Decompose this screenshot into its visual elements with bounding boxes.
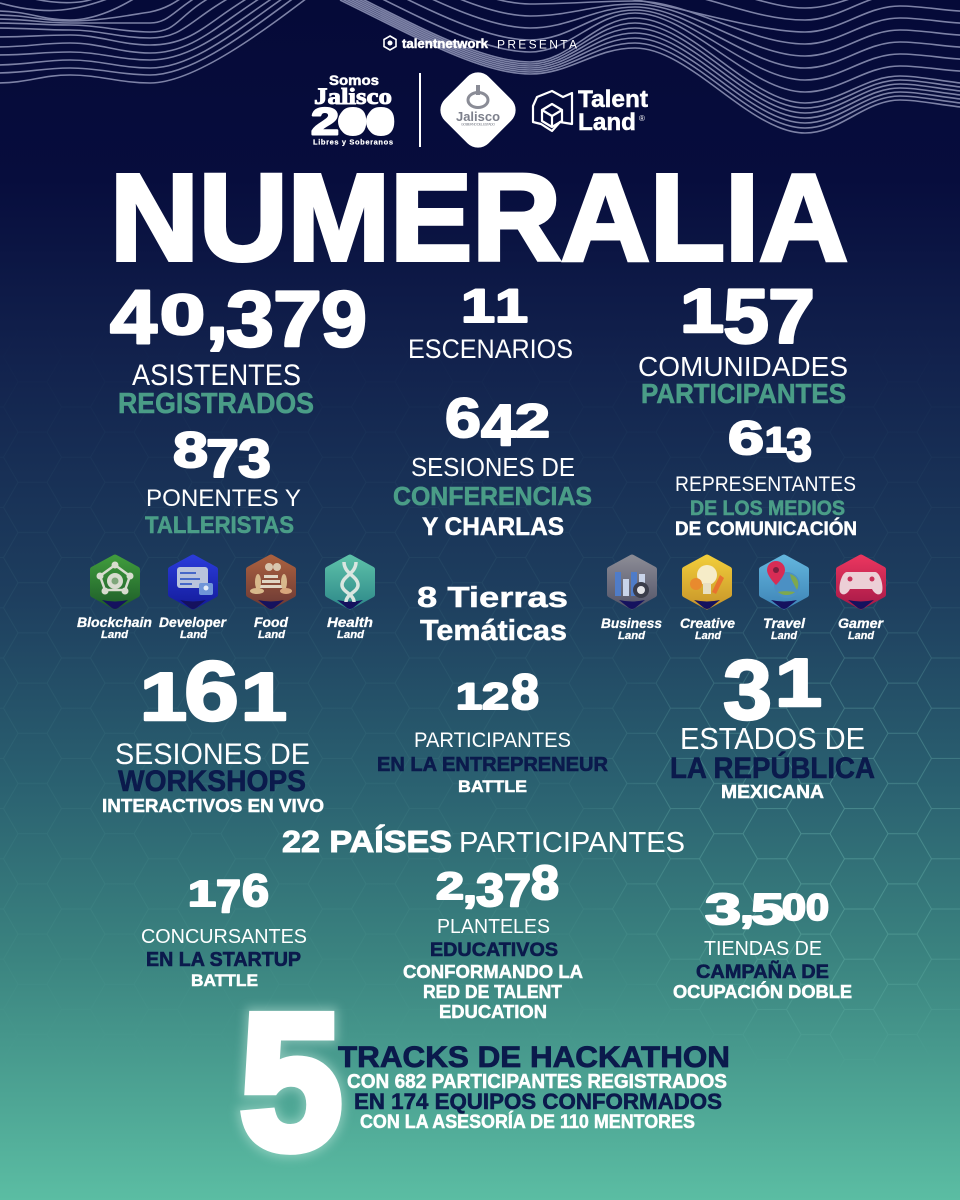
stat: 613 representantes de los medios: DE LOS MEDIOS: [690, 497, 845, 520]
stat: 613 representantes de los medios: REPRESENTANTES: [675, 473, 856, 496]
stat: 128 participantes entrepreneur battle: 2: [482, 676, 509, 717]
heading: 8 Tierras Temáticas: 8 Tierras: [417, 582, 568, 614]
big number 5 with glow: 5: [240, 974, 342, 1189]
stat: 11 escenarios: [408, 279, 573, 364]
stat: 176 concursantes startup battle: CONCURSANTES: [141, 926, 307, 948]
stat: 3,500 tiendas campaña: 5: [751, 885, 784, 934]
badge: Developer Land: [159, 558, 228, 641]
badge: Health Land: Health: [327, 614, 373, 630]
stat: 642 sesiones de conferencias y charlas: 4: [481, 393, 516, 458]
stat: 2,378 planteles educativos: PLANTELES: [437, 916, 550, 938]
heading: 22 países participantes: 22 PAÍSES: [282, 824, 452, 859]
decorative waves right: [340, 0, 960, 133]
stat: 3,500 tiendas campaña: CAMPAÑA DE: [696, 961, 829, 983]
stat: 613 representantes de los medios: [675, 411, 857, 540]
stat: 31 estados de la república: LA REPÚBLICA: [670, 751, 875, 785]
logo: Jalisco gobierno del estado: [434, 66, 522, 154]
stat: 40,379 asistentes registrados: ASISTENTES: [132, 359, 301, 392]
decorative waves left: [0, 0, 315, 83]
badge: Creative Land: Creative: [680, 615, 735, 631]
presenter line: talentnetwork presenta: [384, 36, 577, 52]
stat: 176 concursantes startup battle: BATTLE: [191, 971, 258, 990]
stat: 161 sesiones de workshops: 1: [140, 659, 187, 735]
heading: 22 países participantes: [282, 824, 685, 859]
stat: 11 escenarios: 1: [495, 279, 528, 332]
hackathon text block: EN 174 EQUIPOS CONFORMADOS: [354, 1089, 722, 1114]
badge: Creative Land: Land: [695, 630, 721, 642]
badge: Travel Land: Travel: [763, 615, 806, 631]
stat: 161 sesiones de workshops: SESIONES DE: [115, 738, 310, 771]
stat: 2,378 planteles educativos: 7: [504, 864, 531, 916]
stat: 157 comunidades participantes: COMUNIDADES: [638, 351, 848, 382]
stat: 176 concursantes startup battle: EN LA STARTUP: [146, 949, 301, 971]
heading: 22 países participantes: PARTICIPANTES: [459, 827, 685, 859]
stat: 613 representantes de los medios: DE COMUNICACIÓN: [675, 518, 857, 540]
stat: 2,378 planteles educativos: [403, 857, 583, 1022]
stat: 642 sesiones de conferencias y charlas: 6: [445, 386, 481, 449]
badge: Gamer Land: [838, 558, 885, 642]
badge: Gamer Land: Gamer: [838, 615, 885, 631]
badge: Developer Land: Land: [180, 629, 207, 641]
stat: 40,379 asistentes registrados: [110, 271, 367, 420]
stat: 128 participantes entrepreneur battle: EN LA ENTREPRENEUR: [377, 754, 609, 776]
badge: Travel Land: [762, 558, 806, 642]
hackathon text block: TRACKS DE HACKATHON: [338, 1041, 730, 1074]
logo: Somos Jalisco 200: Jalisco: [314, 84, 392, 109]
stat: 873 ponentes y talleristas: 7: [206, 429, 239, 489]
title: NUMERALIA: [110, 150, 848, 287]
stat: 157 comunidades participantes: PARTICIPANTES: [641, 378, 846, 409]
stat: 11 escenarios: 1: [461, 279, 495, 332]
background hexagon pattern: [0, 544, 960, 686]
stat: 3,500 tiendas campaña: 3: [705, 885, 741, 934]
stat: 873 ponentes y talleristas: TALLERISTAS: [145, 512, 294, 539]
badge: Travel Land: Land: [771, 630, 797, 642]
logo: Talent Land: ®: [639, 114, 645, 123]
stat: 176 concursantes startup battle: 1: [188, 873, 216, 914]
stat: 161 sesiones de workshops: [102, 644, 324, 816]
stat: 161 sesiones de workshops: INTERACTIVOS EN VIVO: [102, 796, 324, 816]
stat: 3,500 tiendas campaña: ,: [740, 887, 754, 931]
stat: 128 participantes entrepreneur battle: 8: [511, 664, 539, 720]
stat: 3,500 tiendas campaña: OCUPACIÓN DOBLE: [673, 981, 852, 1002]
hackathon text block: [338, 1041, 730, 1133]
stat: 3,500 tiendas campaña: TIENDAS DE: [704, 938, 822, 960]
stat: 873 ponentes y talleristas: 3: [238, 429, 271, 489]
presenter line: talentnetwork presenta: PRESENTA: [497, 38, 577, 52]
stat: 40,379 asistentes registrados: 0: [160, 283, 205, 347]
logo: Jalisco gobierno del estado: Jalisco: [456, 110, 500, 124]
stat: 31 estados de la república: MEXICANA: [721, 782, 824, 802]
logo: Somos Jalisco 200: Libres y Soberanos: [313, 138, 393, 146]
badge: Food Land: Land: [258, 629, 285, 641]
badge: Blockchain Land: Blockchain: [77, 614, 152, 630]
stat: 176 concursantes startup battle: 7: [216, 870, 241, 922]
stat: 642 sesiones de conferencias y charlas: Y CHARLAS: [422, 513, 564, 541]
badge: Health Land: Land: [337, 629, 364, 641]
stat: 31 estados de la república: 1: [775, 645, 822, 721]
stat: 2,378 planteles educativos: EDUCATIVOS: [430, 940, 558, 961]
logo: Talent Land: [533, 86, 648, 136]
big number 5 with glow: 5: [240, 974, 342, 1189]
stat: 128 participantes entrepreneur battle: [377, 664, 609, 796]
badge: Blockchain Land: [77, 558, 152, 641]
stat: 642 sesiones de conferencias y charlas: SESIONES DE: [411, 452, 575, 482]
stat: 613 representantes de los medios: 1: [765, 421, 787, 460]
stat: 40,379 asistentes registrados: 3: [226, 274, 274, 363]
stat: 40,379 asistentes registrados: 7: [273, 274, 322, 363]
stat: 31 estados de la república: ESTADOS DE: [680, 721, 865, 756]
stat: 873 ponentes y talleristas: 8: [173, 422, 208, 478]
stat: 2,378 planteles educativos: 8: [531, 857, 559, 910]
stat: 161 sesiones de workshops: 6: [184, 644, 239, 738]
stat: 40,379 asistentes registrados: 4: [110, 275, 157, 360]
stat: 2,378 planteles educativos: EDUCATION: [439, 1002, 547, 1022]
stat: 128 participantes entrepreneur battle: PARTICIPANTES: [414, 729, 571, 752]
stat: 2,378 planteles educativos: 3: [476, 864, 504, 916]
badge: Food Land: [249, 558, 293, 641]
stat: 128 participantes entrepreneur battle: 1: [456, 676, 482, 717]
logo: Somos Jalisco 200: Somos: [329, 72, 379, 88]
stat: 40,379 asistentes registrados: ,: [206, 271, 228, 355]
badge: Gamer Land: Land: [848, 630, 874, 642]
stat: 873 ponentes y talleristas: PONENTES Y: [146, 485, 301, 512]
stat: 161 sesiones de workshops: WORKSHOPS: [118, 765, 306, 798]
stat: 2,378 planteles educativos: ,: [463, 867, 477, 911]
logo divider: [419, 73, 421, 147]
stat: 613 representantes de los medios: 3: [786, 419, 812, 471]
badge: Business Land: Land: [618, 630, 645, 642]
stat: 3,500 tiendas campaña: 0: [806, 887, 829, 928]
logo: Jalisco gobierno del estado: GOBIERNO DEL ESTADO: [461, 122, 495, 126]
badge: Health Land: [327, 558, 373, 641]
presenter line: talentnetwork presenta: talentnetwork: [402, 36, 489, 51]
heading: 8 Tierras Temáticas: [417, 582, 568, 647]
stat: 2,378 planteles educativos: CONFORMANDO LA: [403, 962, 583, 982]
badge: Business Land: [601, 558, 662, 642]
stat: 3,500 tiendas campaña: [673, 885, 852, 1002]
stat: 873 ponentes y talleristas: [145, 422, 301, 539]
logo: Somos Jalisco 200: [311, 72, 395, 146]
badge: Business Land: Business: [601, 615, 662, 631]
background hexagon pattern right emphasis: [616, 598, 960, 1012]
logo: Talent Land: Talent: [578, 86, 648, 113]
stat: 176 concursantes startup battle: 6: [242, 865, 269, 916]
stat: 157 comunidades participantes: 5: [723, 274, 769, 360]
stat: 176 concursantes startup battle: [141, 865, 307, 990]
stat: 157 comunidades participantes: [638, 274, 848, 409]
logo: Talent Land: Land: [578, 109, 636, 136]
stat: 642 sesiones de conferencias y charlas: 2: [515, 394, 550, 447]
stat: 2,378 planteles educativos: 2: [436, 866, 464, 908]
stat: 40,379 asistentes registrados: 9: [321, 274, 367, 363]
stat: 31 estados de la república: [670, 643, 875, 802]
badge: Blockchain Land: Land: [101, 629, 128, 641]
stat: 642 sesiones de conferencias y charlas: [393, 386, 592, 541]
stat: 161 sesiones de workshops: 1: [241, 659, 287, 735]
stat: 3,500 tiendas campaña: 0: [782, 887, 806, 928]
badge: Food Land: Food: [254, 614, 288, 630]
stat: 157 comunidades participantes: 1: [680, 277, 724, 346]
heading: 8 Tierras Temáticas: Temáticas: [420, 615, 567, 647]
badge: Creative Land: [680, 558, 735, 642]
stat: 642 sesiones de conferencias y charlas: CONFERENCIAS: [393, 481, 592, 511]
hackathon text block: CON LA ASESORÍA DE 110 MENTORES: [360, 1111, 695, 1133]
stat: 31 estados de la república: 3: [723, 643, 772, 737]
stat: 11 escenarios: ESCENARIOS: [408, 334, 573, 364]
stat: 40,379 asistentes registrados: REGISTRADOS: [118, 388, 314, 420]
stat: 128 participantes entrepreneur battle: BATTLE: [458, 777, 527, 796]
hackathon text block: CON 682 PARTICIPANTES REGISTRADOS: [347, 1071, 727, 1093]
stat: 157 comunidades participantes: 7: [768, 274, 815, 360]
stat: 613 representantes de los medios: 6: [728, 411, 764, 464]
logo: Somos Jalisco 200: 200: [311, 102, 395, 144]
stat: 2,378 planteles educativos: RED DE TALENT: [423, 982, 562, 1002]
badge: Developer Land: Developer: [159, 614, 228, 630]
